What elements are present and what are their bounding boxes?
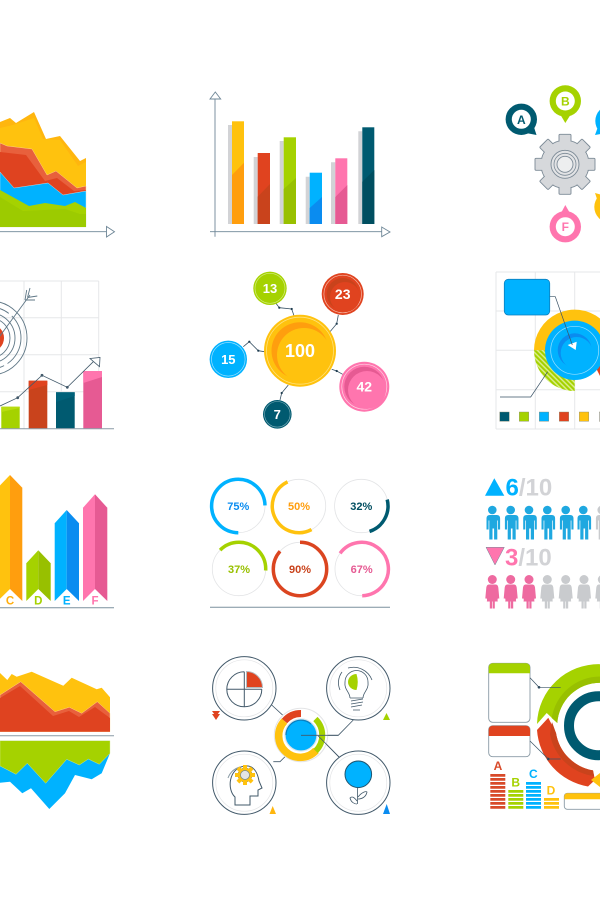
bubble B: B (561, 94, 570, 108)
bubble A (506, 104, 537, 135)
mini bars (490, 759, 559, 809)
axis (0, 226, 114, 237)
connectors (243, 302, 343, 400)
bar (56, 392, 75, 428)
yellow arrow (591, 773, 600, 787)
donut (534, 310, 600, 391)
red arc (537, 718, 595, 786)
icon: gear (535, 134, 595, 194)
axis (0, 735, 114, 737)
ring 75% (212, 479, 265, 533)
circle: head gear icon (213, 751, 276, 814)
panel: concept circles diagram (212, 657, 390, 814)
green arc (537, 664, 600, 724)
panel: bar chart (210, 92, 390, 237)
axis (210, 606, 390, 608)
panel: arrow bar chart (0, 475, 114, 608)
bottom bar box (564, 793, 600, 809)
icon: red marker (212, 711, 220, 720)
mini bars: B (511, 776, 520, 790)
ring 90% (273, 542, 327, 596)
ring 37% (201, 531, 277, 607)
panel: stacked area chart (0, 112, 114, 237)
women row (485, 575, 600, 608)
circle: flower icon (327, 751, 390, 814)
bubble B (550, 85, 581, 123)
circle: bulb icon (327, 657, 390, 720)
mini bars: A (494, 759, 503, 773)
axis (0, 607, 114, 609)
bubble 42: 42 (357, 378, 372, 394)
ring 32% (329, 474, 394, 538)
men row (486, 506, 600, 540)
connectors (530, 678, 561, 760)
bubble 42 (339, 362, 389, 412)
bubble 23 (322, 273, 364, 315)
panel: target and growth chart (0, 281, 114, 429)
box red (489, 726, 530, 757)
bar (29, 381, 47, 428)
bubble 13 (253, 272, 287, 305)
ring 50%: 50% (288, 501, 310, 513)
stat 3/10: 3/10 (505, 544, 552, 572)
bar (284, 137, 296, 224)
ring 37%: 37% (228, 564, 250, 576)
ring 67% (324, 532, 399, 606)
bubble 7 (263, 400, 292, 429)
bubble 100: 100 (285, 341, 315, 361)
ring 67%: 67% (351, 564, 373, 576)
bubble 100 (264, 315, 336, 387)
icon: yellow marker (270, 806, 276, 814)
bar (335, 158, 347, 224)
bubble A: A (517, 113, 526, 127)
icon: blue marker (383, 804, 390, 814)
axis (0, 428, 114, 430)
bar (310, 173, 322, 224)
axes (210, 92, 390, 237)
icon: target (0, 288, 37, 375)
bubble 7: 7 (274, 407, 281, 422)
bubble 15: 15 (221, 352, 236, 367)
bubble 23: 23 (335, 286, 351, 302)
icon: green marker (383, 713, 390, 720)
stat 6/10: 6/10 (506, 474, 552, 502)
teal ring (569, 696, 600, 755)
bar (1, 407, 20, 428)
bubble F: F (562, 220, 569, 234)
bar (258, 153, 270, 224)
connector lines (500, 297, 572, 397)
ring 90%: 90% (289, 564, 311, 576)
bar (83, 371, 102, 428)
legend (500, 412, 600, 421)
bubble E (594, 191, 600, 223)
bubble F (550, 205, 581, 242)
trend arrow (0, 358, 100, 406)
mini bars: C (529, 767, 538, 781)
panel: gear with bubbles (506, 85, 600, 242)
panel: circular arrows with boxes (489, 663, 600, 809)
central ring (274, 708, 339, 762)
ring 32%: 32% (350, 501, 373, 513)
box green (489, 663, 530, 722)
arrow D: D (34, 596, 42, 608)
ring 50% (263, 470, 335, 542)
panel: mirrored area chart (0, 672, 114, 809)
bubble C (595, 105, 600, 137)
panel: number bubbles (210, 272, 389, 429)
bar (232, 121, 244, 224)
arrow F: F (91, 596, 99, 608)
mini bars: D (547, 784, 556, 798)
icon: triangle down (486, 547, 504, 565)
panel: donut with legend (496, 272, 600, 429)
ring 75%: 75% (227, 501, 250, 513)
icon: triangle up (485, 478, 504, 496)
panel: percentage rings (201, 470, 399, 607)
panel: people statistics (485, 474, 600, 608)
arrow C: C (6, 596, 14, 608)
arrow E: E (63, 596, 71, 608)
bubble 13: 13 (263, 281, 277, 296)
bubble 15 (210, 341, 247, 378)
connectors (272, 705, 353, 762)
circle: pie icon (213, 657, 276, 720)
bar (362, 127, 374, 224)
callout box (504, 279, 550, 315)
